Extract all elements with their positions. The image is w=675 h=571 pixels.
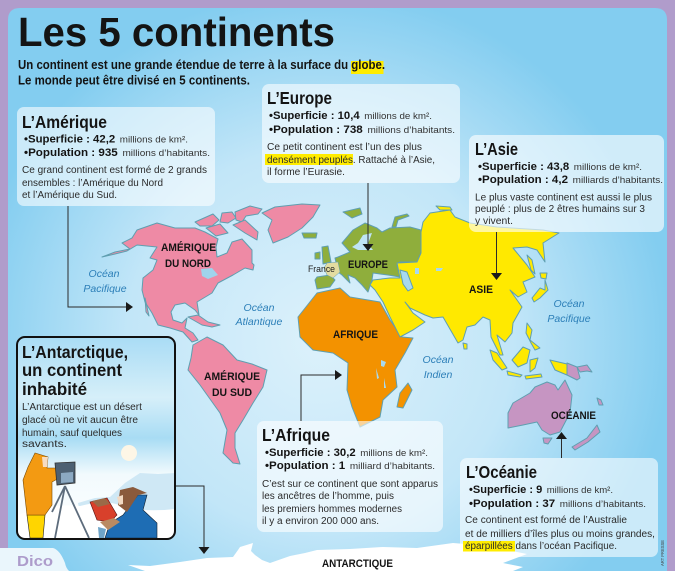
- label: Océan Indien: [423, 354, 454, 381]
- intro lines: Un continent est une grande étendue de terre à la surface du globe.: [18, 58, 385, 72]
- heading: [22, 342, 128, 399]
- Great Lakes: [201, 268, 218, 279]
- label: Océan Pacifique west: [83, 268, 127, 295]
- description: Ce grand continent est formé de 2 grands: [22, 165, 207, 176]
- Aral sea: [415, 268, 443, 274]
- label: Océanie: OCÉANIE: [551, 409, 596, 422]
- panel: Océanie: [460, 458, 658, 557]
- stats: •Superficie : 9 millions de km².: [469, 480, 613, 497]
- label: Océan Indien: Océan: [423, 354, 454, 366]
- arrow: Asie: [491, 232, 502, 280]
- title: Les 5 continents: [18, 9, 335, 55]
- highlight: globe: [351, 61, 384, 74]
- description: C’est sur ce continent que sont apparus: [262, 479, 438, 490]
- description: Ce petit continent est l’un des plus: [267, 142, 422, 153]
- description: ensembles : l’Amérique du Nord: [22, 178, 163, 189]
- panel: Afrique: [257, 421, 443, 532]
- continent: North America: [102, 204, 320, 342]
- heading: L’Océanie: [466, 462, 537, 482]
- description: [475, 192, 652, 227]
- label: Amérique du Nord: DU NORD: [165, 258, 211, 270]
- red jacket: [90, 498, 117, 522]
- description: peuplé : plus de 2 êtres humains sur 3: [475, 204, 645, 215]
- intro text: [18, 58, 385, 88]
- stats: •Superficie : 30,2 millions de km².: [265, 443, 428, 460]
- label: Océan Pacifique west: Océan: [89, 268, 120, 280]
- label: Amérique du Sud: AMÉRIQUE: [204, 370, 260, 383]
- border: [17, 337, 175, 539]
- label: Amérique du Nord: AMÉRIQUE: [161, 241, 216, 254]
- heading: inhabité: [22, 379, 87, 399]
- description: Ce continent est formé de l’Australie: [465, 515, 627, 526]
- description: et de milliers d’îles plus ou moins grandes,: [465, 529, 655, 540]
- heading: L’Antarctique,: [22, 342, 128, 362]
- sun: [121, 445, 137, 461]
- description: il forme l’Eurasie.: [267, 167, 345, 178]
- arrows: [68, 183, 567, 554]
- description: [465, 515, 655, 552]
- tab text: Dico: [17, 553, 53, 570]
- label: Océan Pacifique west: Pacifique: [83, 283, 127, 295]
- continent: Asia: [370, 206, 567, 379]
- label: Antarctique: ANTARCTIQUE: [322, 558, 393, 570]
- description: éparpillées dans l’océan Pacifique.: [465, 541, 617, 552]
- label: Amérique du Sud: [204, 370, 260, 399]
- Baltic sea: [352, 233, 373, 250]
- description: [22, 165, 207, 201]
- label: Asie: ASIE: [469, 284, 493, 296]
- Antarctica landmass: [128, 543, 527, 571]
- camera: [55, 462, 75, 485]
- label: Océan Atlantique: [235, 302, 283, 328]
- stats: •Population : 37 millions d’habitants.: [469, 494, 646, 511]
- heading: L’Afrique: [262, 425, 330, 445]
- Dico tab: [0, 548, 69, 571]
- stats: •Superficie : 42,2 millions de km².: [24, 130, 188, 146]
- sleeve: [100, 518, 120, 530]
- label: Océan Atlantique: Atlantique: [235, 316, 283, 328]
- description: [22, 402, 142, 450]
- description: savants.: [22, 439, 67, 450]
- fur hood: [118, 487, 147, 512]
- continent: Oceania: [508, 363, 603, 450]
- stats: •Population : 935 millions d’habitants.: [24, 143, 210, 160]
- arrow: Europe: [362, 183, 374, 251]
- tripod: [52, 486, 89, 538]
- heading: L’Europe: [267, 88, 332, 108]
- arrow: Océanie: [556, 432, 567, 458]
- pale blue trouser: [98, 527, 106, 538]
- arrow: Amérique: [68, 206, 133, 312]
- panel: Asie: [469, 135, 664, 232]
- face of second figure: [117, 495, 123, 505]
- illustration: scientists in the snow: [18, 445, 175, 538]
- continent: Africa: [298, 288, 413, 427]
- label: Amérique du Nord: [161, 241, 216, 270]
- label: Océan Pacifique east: Océan: [554, 298, 585, 310]
- description: les ancêtres de l’homme, puis: [262, 491, 394, 502]
- highlight: éparpillées: [463, 541, 515, 552]
- stats: •Population : 4,2 milliards d’habitants.: [478, 170, 663, 187]
- label: Europe: EUROPE: [348, 259, 388, 271]
- heading: L’Asie: [475, 139, 518, 159]
- credit: ART PRESSE: [660, 540, 665, 566]
- description: il y a environ 200 000 ans.: [262, 516, 379, 527]
- description: L’Antarctique est un désert: [22, 402, 142, 413]
- intro lines: Le monde peut être divisé en 5 continents.: [18, 74, 250, 88]
- description: et l’Amérique du Sud.: [22, 190, 117, 201]
- label: Amérique du Sud: DU SUD: [212, 387, 252, 399]
- label: Océan Atlantique: Océan: [244, 302, 275, 314]
- panel: Amérique: [17, 107, 215, 206]
- label: Océan Pacifique east: [547, 298, 591, 325]
- description: [262, 479, 438, 527]
- description: densément peuplés. Rattaché à l’Asie,: [267, 155, 435, 166]
- arrow: Antarctique: [176, 486, 210, 554]
- label: Océan Indien: Indien: [424, 369, 452, 381]
- African lakes: [376, 360, 386, 388]
- stats: •Superficie : 43,8 millions de km².: [478, 157, 642, 174]
- France highlighted: [324, 262, 340, 278]
- description: [267, 142, 435, 178]
- trousers: [27, 515, 45, 538]
- description: Le plus vaste continent est aussi le plus: [475, 192, 652, 204]
- stats: [24, 130, 210, 160]
- intro lines: [18, 58, 385, 88]
- stats: [265, 443, 435, 473]
- Caspian sea: [400, 270, 413, 291]
- heading: L’Amérique: [22, 112, 107, 132]
- orange parka: [23, 453, 68, 515]
- continent: South America: [188, 337, 267, 464]
- description: humain, sauf quelques: [22, 428, 122, 439]
- highlight: densément peuplés: [265, 154, 353, 165]
- panel: Antarctique: [17, 337, 175, 539]
- label: Afrique: AFRIQUE: [333, 329, 378, 341]
- stats: •Population : 1 milliard d’habitants.: [265, 456, 435, 473]
- face: [42, 457, 48, 467]
- continent: Europe: [302, 208, 421, 292]
- map labels: [83, 241, 596, 570]
- stats: •Superficie : 10,4 millions de km².: [269, 106, 432, 123]
- camera screen: [61, 472, 73, 483]
- stats: •Population : 738 millions d’habitants.: [269, 120, 455, 137]
- label: Océan Pacifique east: Pacifique: [547, 313, 591, 325]
- description: glacé où ne vit aucun être: [22, 415, 138, 426]
- description: y vivent.: [475, 216, 513, 227]
- arrow: Afrique: [301, 370, 342, 421]
- stats: [269, 106, 455, 137]
- label: France: France: [308, 264, 335, 275]
- stats: [478, 157, 663, 187]
- stats: [469, 480, 646, 511]
- description: les premiers hommes modernes: [262, 504, 402, 515]
- world map: [102, 204, 603, 464]
- mountains: [78, 473, 175, 513]
- panel: Europe: [262, 84, 460, 183]
- heading: un continent: [22, 360, 122, 380]
- blue parka: [105, 495, 157, 538]
- brown mitten: [92, 498, 110, 507]
- snow ground: [18, 502, 175, 538]
